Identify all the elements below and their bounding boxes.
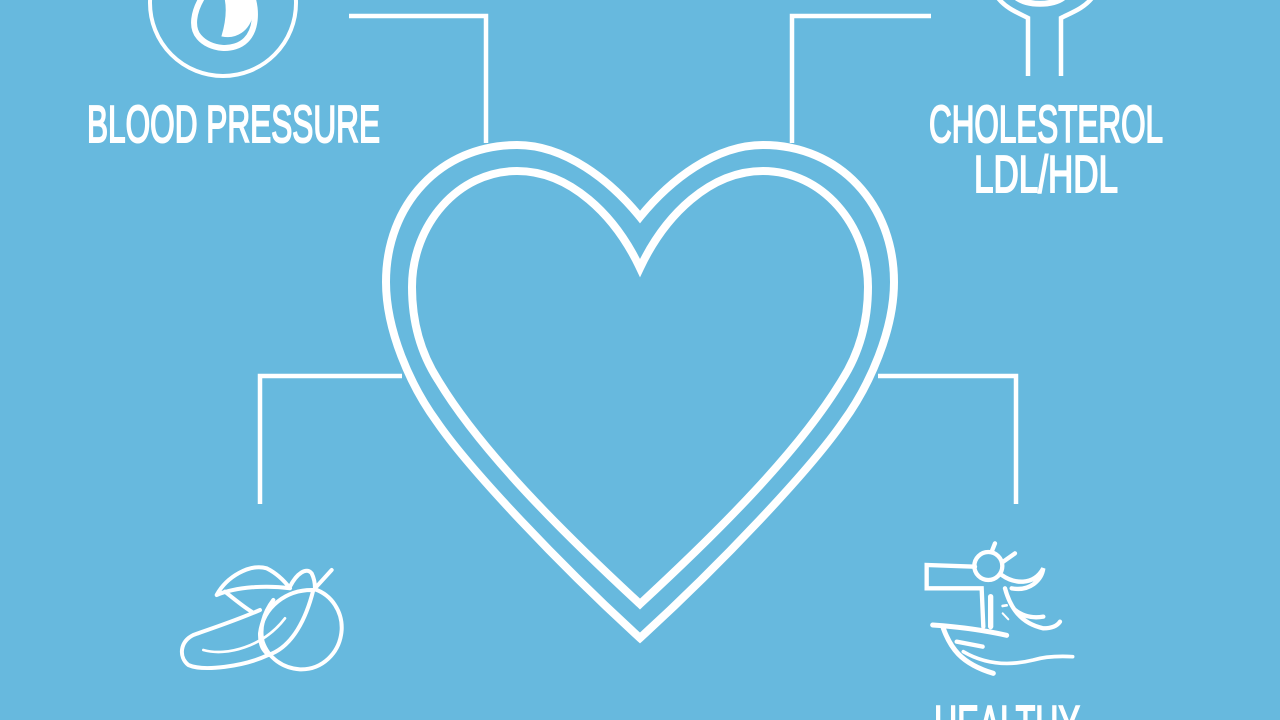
- heart inner outline: [412, 171, 868, 604]
- icon: blood pressure drop: [150, 0, 296, 76]
- connector: blood pressure: [349, 16, 486, 143]
- heart outer outline: [386, 145, 894, 638]
- label: LDL/HDL: LDL/HDL: [974, 146, 1118, 204]
- connector: cholesterol: [792, 16, 931, 143]
- icon: healthy lifestyle figure on hand: [927, 543, 1073, 673]
- connector: healthy lifestyle: [878, 376, 1016, 504]
- icon: cholesterol: [998, 0, 1092, 76]
- connector: diet: [260, 376, 402, 504]
- icon: fruit and vegetables: [182, 567, 342, 669]
- label: blood pressure: BLOOD PRESSURE: [87, 96, 380, 154]
- central heart: [386, 145, 894, 638]
